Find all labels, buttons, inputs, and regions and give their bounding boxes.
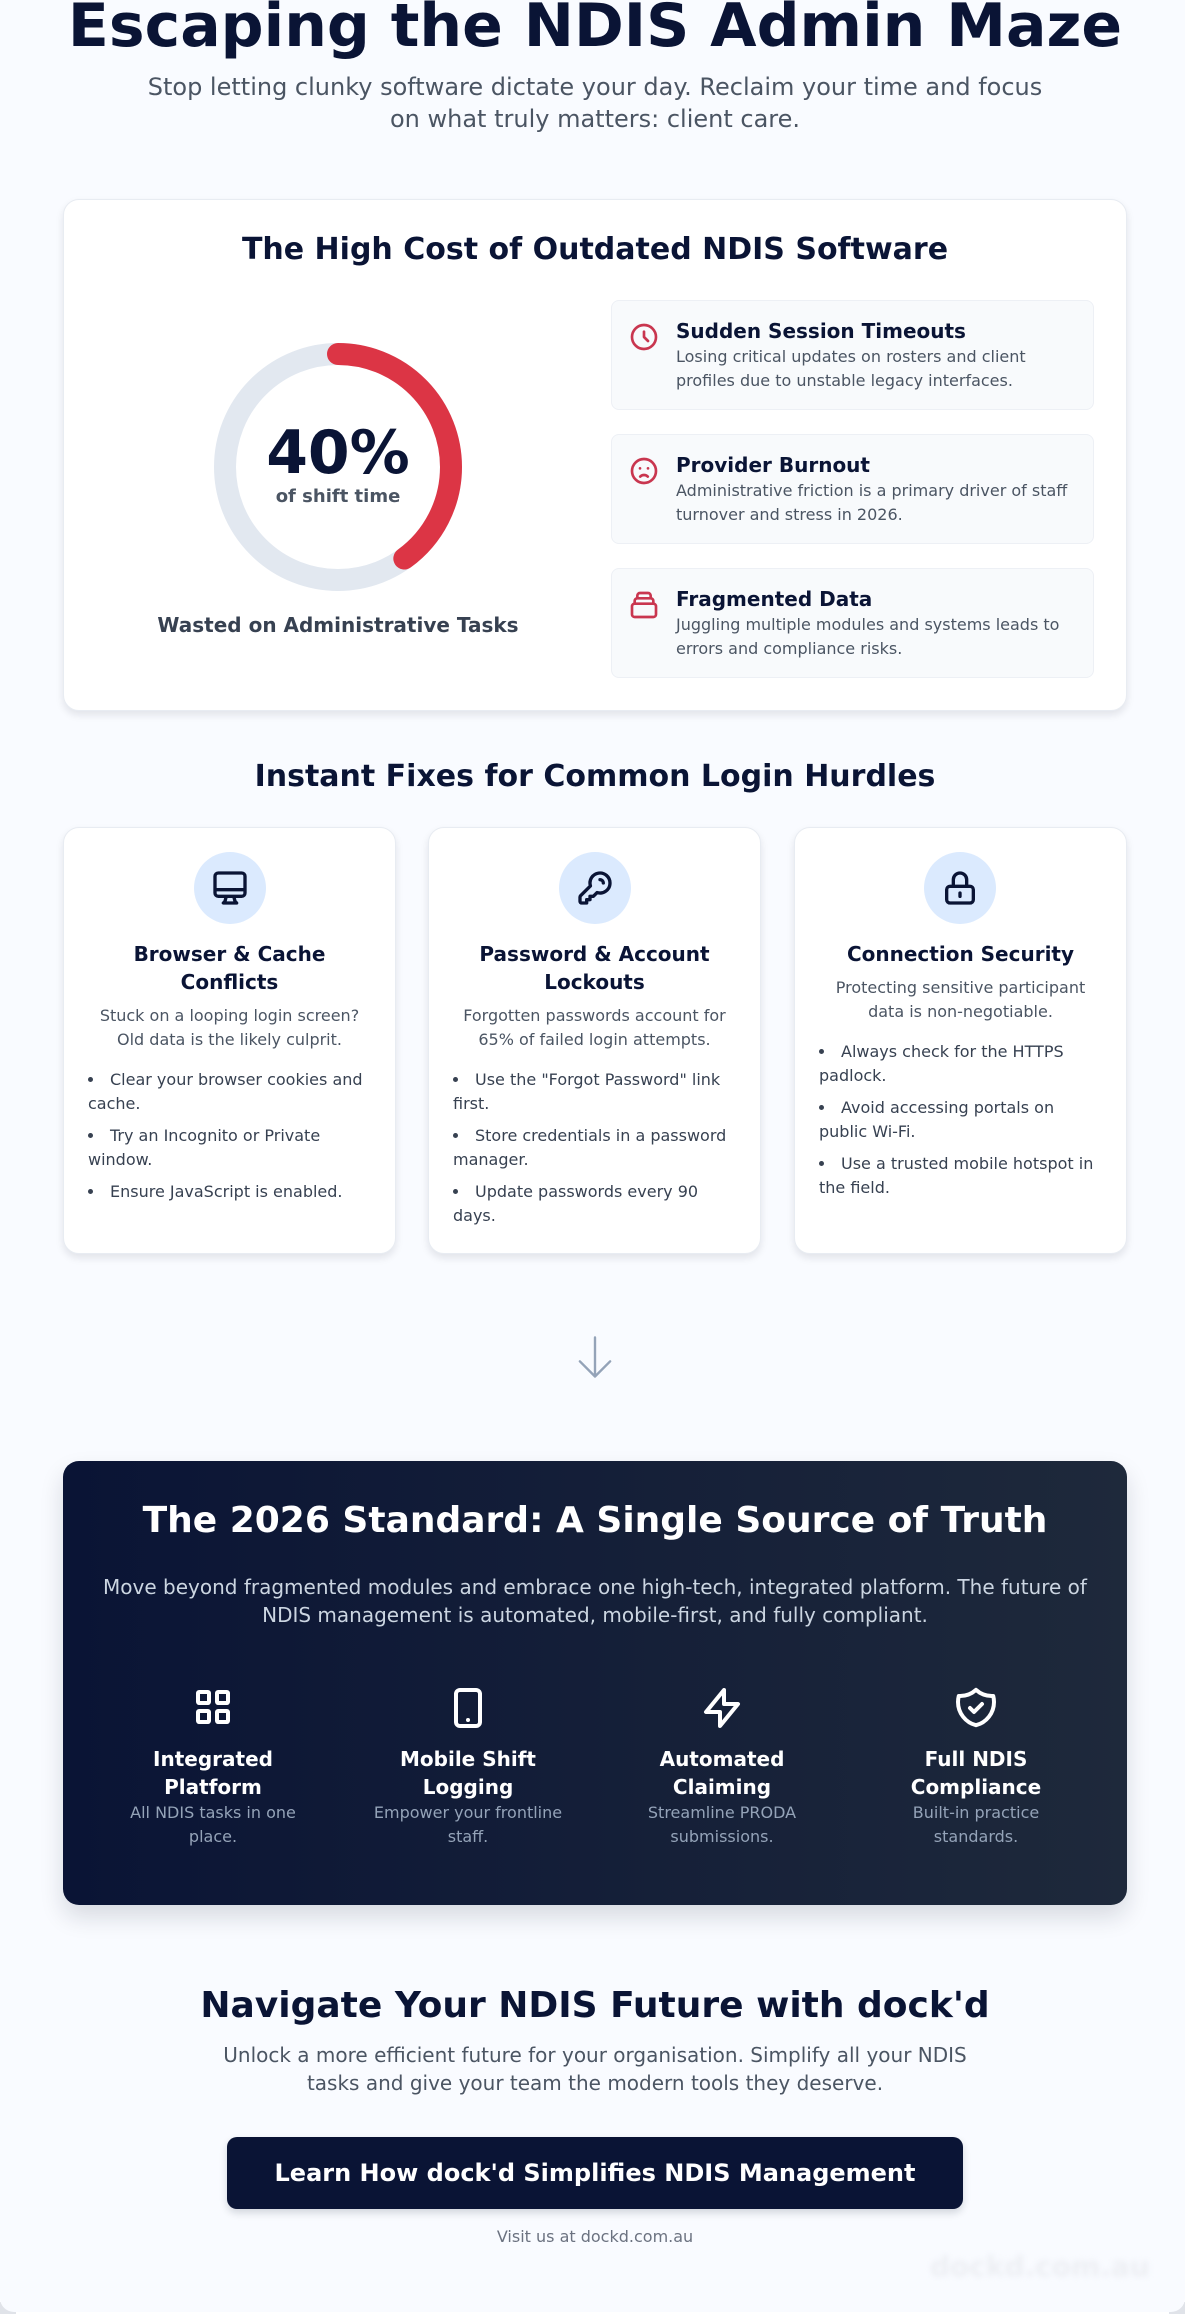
feature text: standards. (934, 1827, 1018, 1846)
card text (463, 1006, 726, 1049)
card text: 65% of failed login attempts. (478, 1030, 711, 1049)
fix list: Use a trusted mobile hotspot in (841, 1154, 1093, 1173)
feature: automated claiming (648, 1688, 796, 1846)
icon: stacked layers (630, 592, 658, 618)
icon: key (559, 852, 631, 924)
donut chart: 40% (214, 343, 462, 591)
donut label: Wasted on Administrative Tasks (157, 613, 519, 637)
issue text: profiles due to unstable legacy interfaces. (676, 371, 1013, 390)
fix list (88, 1070, 363, 1201)
fix list: first. (453, 1094, 489, 1113)
feature: compliance (911, 1688, 1041, 1846)
issue text: Losing critical updates on rosters and client (676, 347, 1026, 366)
donut value: 40% (266, 418, 410, 488)
subtitle (148, 73, 1042, 133)
fix list: Update passwords every 90 (475, 1182, 698, 1201)
fix list: Ensure JavaScript is enabled. (110, 1182, 343, 1201)
icon: shield check (956, 1688, 996, 1728)
panel heading: The 2026 Standard: A Single Source of Truth (143, 1500, 1047, 1541)
issue text (676, 347, 1026, 390)
feature text: All NDIS tasks in one (130, 1803, 296, 1822)
button label: Learn How dock'd Simplifies NDIS Management (275, 2159, 915, 2187)
card title: Lockouts (544, 970, 645, 994)
feature text: Streamline PRODA (648, 1803, 796, 1822)
fix list: Try an Incognito or Private (110, 1126, 320, 1145)
issue card: session timeouts (611, 300, 1094, 410)
issue title: Fragmented Data (676, 587, 872, 611)
card text: data is non-negotiable. (868, 1002, 1053, 1021)
CTA text: tasks and give your team the modern tools they deserve. (307, 2071, 883, 2095)
feature: integrated platform (130, 1690, 296, 1846)
issue text: Administrative friction is a primary driver of staff (676, 481, 1067, 500)
donut caption: of shift time (276, 486, 400, 507)
card title: Password & Account (479, 942, 710, 966)
CTA button (227, 2137, 963, 2209)
fix list: the field. (819, 1178, 890, 1197)
card title: Conflicts (181, 970, 278, 994)
fix list: public Wi-Fi. (819, 1122, 915, 1141)
card title: Connection Security (847, 942, 1074, 966)
fix list: days. (453, 1206, 496, 1225)
feature title (153, 1747, 273, 1799)
feature: mobile shift logging (374, 1688, 562, 1846)
panel: connection security (794, 827, 1127, 1254)
fix list: Store credentials in a password (475, 1126, 726, 1145)
CTA text: Unlock a more efficient future for your organisation. Simplify all your NDIS (223, 2043, 967, 2067)
feature title: Logging (423, 1775, 513, 1799)
issue text: Juggling multiple modules and systems leads to (676, 615, 1059, 634)
fix list (453, 1070, 726, 1225)
feature title (400, 1747, 536, 1799)
issue text (675, 615, 1059, 658)
issue title: Provider Burnout (676, 453, 870, 477)
icon: grid (196, 1690, 230, 1724)
card text: Stuck on a looping login screen? (100, 1006, 359, 1025)
section heading: instant fixes: Instant Fixes for Common Login Hurdles (255, 759, 935, 794)
panel: password and account (428, 827, 761, 1254)
feature text (374, 1803, 562, 1846)
issue card: fragmented data (611, 568, 1094, 678)
feature text (130, 1803, 296, 1846)
feature title: Automated (660, 1747, 784, 1771)
feature title: Mobile Shift (400, 1747, 536, 1771)
feature title: Platform (164, 1775, 262, 1799)
icon: sad face (630, 458, 658, 484)
fix list: Clear your browser cookies and (110, 1070, 363, 1089)
feature title: Integrated (153, 1747, 273, 1771)
icon: clock (630, 324, 658, 350)
watermark: dockd.com.au (930, 2250, 1150, 2283)
feature text (913, 1803, 1039, 1846)
feature text: Built-in practice (913, 1803, 1039, 1822)
icon: padlock (924, 852, 996, 924)
feature text: submissions. (670, 1827, 774, 1846)
fix list: Avoid accessing portals on (841, 1098, 1054, 1117)
fix list: cache. (88, 1094, 140, 1113)
fix list: Use the "Forgot Password" link (475, 1070, 720, 1089)
feature title: Full NDIS (925, 1747, 1027, 1771)
feature title (660, 1747, 784, 1799)
card text: Protecting sensitive participant (836, 978, 1085, 997)
subtitle: Stop letting clunky software dictate your day. Reclaim your time and focus (148, 73, 1042, 101)
subtitle: on what truly matters: client care. (390, 105, 800, 133)
fix list: padlock. (819, 1066, 886, 1085)
feature title (911, 1747, 1041, 1799)
issue text: errors and compliance risks. (676, 639, 902, 658)
feature title: Claiming (673, 1775, 771, 1799)
panel description: NDIS management is automated, mobile-first, and fully compliant. (262, 1603, 928, 1627)
issue text (676, 481, 1068, 524)
panel: browser and cache (63, 827, 396, 1254)
feature text: place. (189, 1827, 237, 1846)
feature title: Compliance (911, 1775, 1041, 1799)
card text: Old data is the likely culprit. (117, 1030, 342, 1049)
CTA text (223, 2043, 967, 2095)
fix list: Always check for the HTTPS (841, 1042, 1064, 1061)
fix list: manager. (453, 1150, 529, 1169)
panel description (103, 1575, 1088, 1627)
panel description: Move beyond fragmented modules and embrace one high-tech, integrated platform. The future of (103, 1575, 1087, 1599)
CTA heading: Navigate Your NDIS Future with dock'd (200, 1985, 990, 2026)
icon: desktop monitor (194, 852, 266, 924)
issue text: turnover and stress in 2026. (676, 505, 903, 524)
arrow: down (578, 1336, 612, 1378)
card title (479, 942, 710, 994)
panel: 2026 standard (63, 1461, 1127, 1905)
card text (836, 978, 1085, 1021)
icon: lightning bolt (704, 1688, 740, 1728)
feature text: Empower your frontline (374, 1803, 562, 1822)
fix list (819, 1042, 1093, 1197)
feature text: staff. (448, 1827, 488, 1846)
card text (100, 1006, 359, 1049)
card text: Forgotten passwords account for (463, 1006, 726, 1025)
issue title: Sudden Session Timeouts (676, 319, 966, 343)
icon: phone (454, 1688, 482, 1728)
panel heading: The High Cost of Outdated NDIS Software (242, 232, 948, 267)
fix list: window. (88, 1150, 152, 1169)
panel: high cost of outdated software (63, 199, 1127, 711)
card title: Browser & Cache (134, 942, 325, 966)
feature text (648, 1803, 796, 1846)
website link: Visit us at dockd.com.au (497, 2227, 693, 2246)
issue card: burnout (611, 434, 1094, 544)
card title (134, 942, 325, 994)
